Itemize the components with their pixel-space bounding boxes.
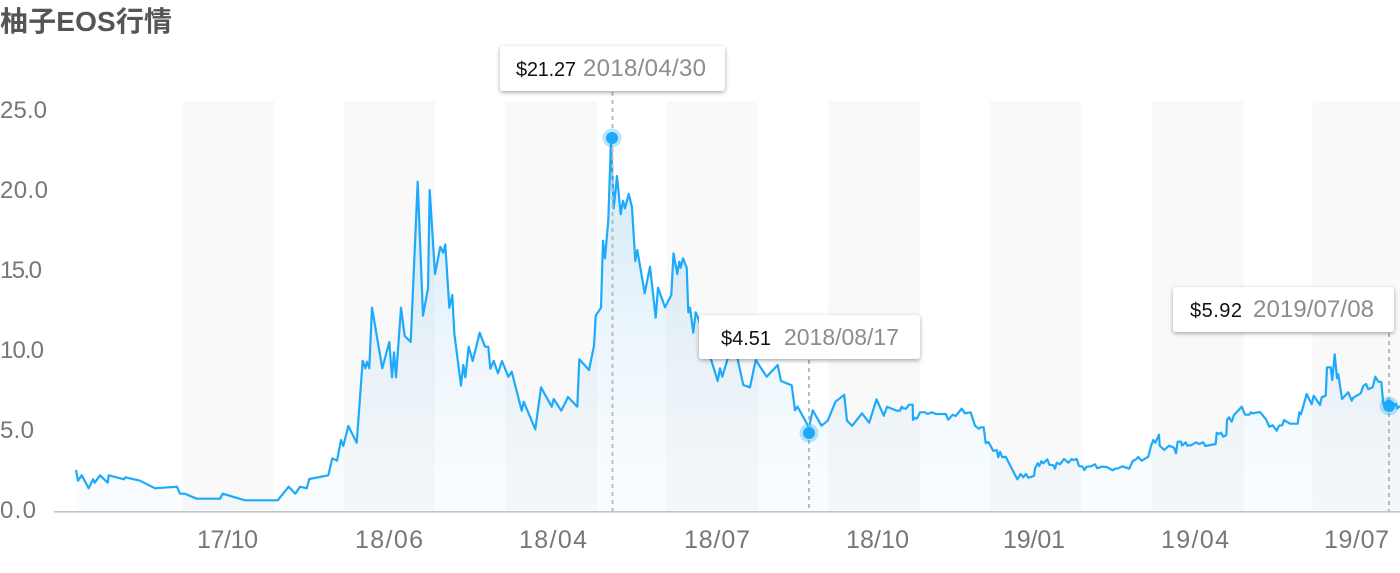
callout: latest price: 2019/07/08 xyxy=(1253,296,1374,323)
x axis line xyxy=(54,511,1400,513)
y axis labels: 5.0 xyxy=(0,417,34,444)
marker: low point xyxy=(800,424,818,442)
x axis labels: 17/10 xyxy=(197,526,258,554)
callout: low price: $4.51 xyxy=(721,328,771,350)
x axis labels xyxy=(197,526,1389,554)
callout: high price: $21.27 xyxy=(516,59,576,81)
dashed marker guide lines xyxy=(612,92,1389,511)
title: 柚子EOS行情 xyxy=(0,6,172,37)
x axis labels: 19/04 xyxy=(1161,526,1229,554)
area under price line xyxy=(76,140,1400,512)
x axis labels: 18/07 xyxy=(684,526,750,554)
x axis labels: 18/10 xyxy=(846,526,909,554)
y axis labels: 10.0 xyxy=(0,337,44,364)
callout: low price xyxy=(699,315,920,359)
y axis labels: 15.0 xyxy=(0,257,42,284)
y axis labels: 0.0 xyxy=(0,497,36,524)
callout: high price xyxy=(500,46,725,91)
alternating background bands xyxy=(182,101,1400,512)
y axis labels xyxy=(0,97,48,524)
callout: high price: 2018/04/30 xyxy=(583,55,706,82)
marker: latest point xyxy=(1380,396,1398,416)
x axis labels: 19/01 xyxy=(1003,526,1065,554)
y axis labels: 20.0 xyxy=(0,177,48,204)
x axis labels: 18/06 xyxy=(355,526,423,554)
callout: latest price: $5.92 xyxy=(1190,300,1242,322)
x axis labels: 18/04 xyxy=(519,526,587,554)
price line xyxy=(76,140,1400,500)
marker: high point xyxy=(602,128,622,148)
y axis labels: 25.0 xyxy=(0,97,47,124)
x axis labels: 19/07 xyxy=(1324,526,1389,554)
callout: latest price xyxy=(1173,287,1394,332)
callout: low price: 2018/08/17 xyxy=(784,324,899,350)
